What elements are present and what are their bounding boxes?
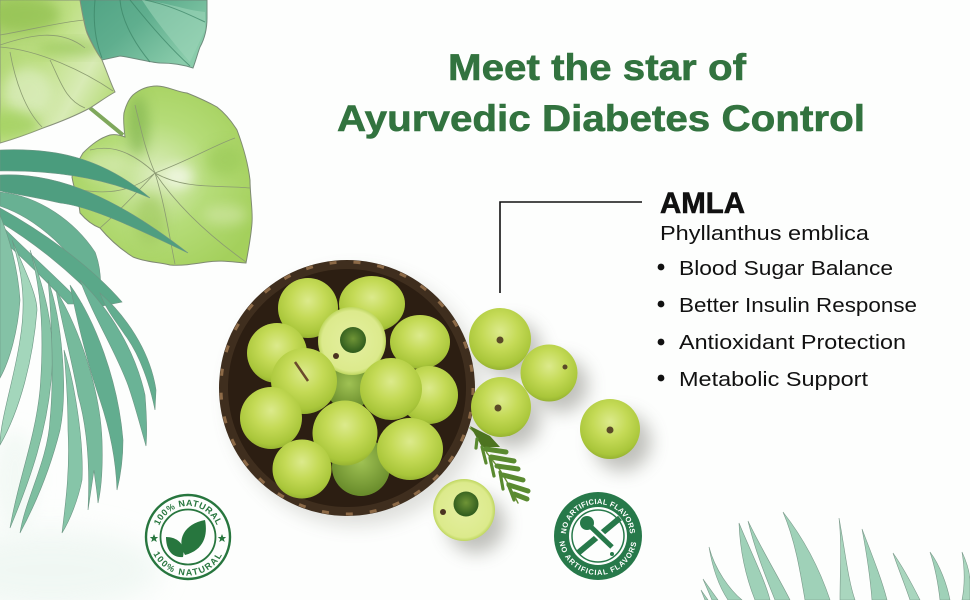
benefits list: Better Insulin Response xyxy=(679,294,917,317)
product text: AMLA: AMLA xyxy=(660,187,745,220)
sprig xyxy=(470,426,528,503)
badge: 100% natural: 100% NATURAL xyxy=(154,500,221,526)
leaf: dark teal top xyxy=(73,0,207,68)
benefits list: Antioxidant Protection xyxy=(679,331,906,354)
badge: no artificial flavors xyxy=(554,492,642,580)
product text: AMLA xyxy=(660,187,870,245)
palm fronds: left xyxy=(0,150,188,533)
badge: no artificial flavors: NO ARTIFICIAL FLAVORS xyxy=(559,541,636,576)
amla fruits in bowl xyxy=(240,276,458,498)
leaf: light green top left xyxy=(0,0,115,143)
leaf stem xyxy=(90,108,123,135)
benefits list: Blood Sugar Balance xyxy=(679,257,893,280)
amla half loose xyxy=(433,479,495,541)
palm fronds: bottom right xyxy=(701,512,970,600)
badge: no artificial flavors: NO ARTIFICIAL FLAVORS xyxy=(560,498,635,534)
amla half in bowl xyxy=(318,307,386,375)
benefits list: Metabolic Support xyxy=(679,368,868,391)
shadows xyxy=(228,270,651,553)
title: Ayurvedic Diabetes Control xyxy=(337,98,865,139)
product text: AMLA: Phyllanthus emblica xyxy=(660,223,870,245)
bowl xyxy=(219,260,475,516)
badge: 100% natural xyxy=(144,494,232,580)
amla fruits loose xyxy=(469,308,640,459)
leaf: large round xyxy=(72,86,252,265)
benefits list xyxy=(658,257,917,391)
badge: 100% natural: 100% NATURAL xyxy=(154,552,222,576)
title: Meet the star of xyxy=(448,47,747,88)
title xyxy=(337,47,865,139)
connector line xyxy=(500,202,642,293)
